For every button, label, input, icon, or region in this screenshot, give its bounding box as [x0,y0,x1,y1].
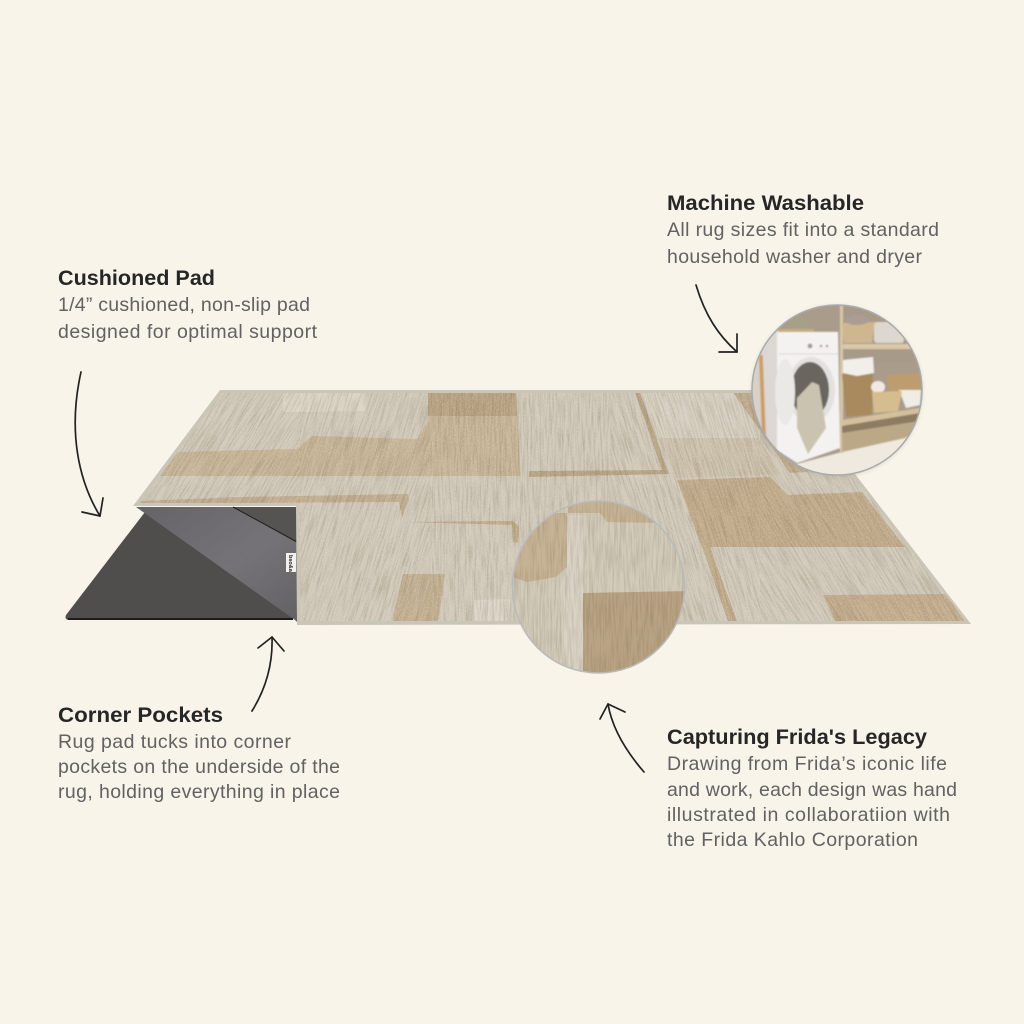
text: Frida legacy: Drawing from Frida’s iconic life [667,753,947,775]
rug: muted tan patch [658,438,782,478]
text: machine washable: household washer and dryer [667,246,922,268]
rug: large tan band [157,392,521,476]
photo: lower cabinet [842,421,920,452]
magnifier: bottom right tan block [583,591,688,677]
photo: glass jars [874,322,904,343]
arrow: Frida legacy [600,704,644,772]
magnifier: vertical weave [510,498,688,676]
rug: L-shaped line [529,392,669,477]
photo: washer body [777,332,840,463]
text: corner pockets [58,704,340,803]
rug [133,390,971,625]
text: Frida legacy: illustrated in collaboratiion with [667,804,950,826]
rug: thin line centre [407,521,519,543]
rug: tan strip behind washer [733,392,808,473]
rug: woven texture slice 5 [760,431,959,621]
text: Frida legacy: the Frida Kahlo Corporation [667,829,918,851]
pad: flat dark corner [66,512,292,620]
rug: tan block bottom right [823,594,965,621]
photo: drum [791,362,829,418]
rug: light lower patch [474,599,510,622]
rug pad [66,507,297,622]
rug: large tan block right [677,477,905,621]
photo: right basket [887,373,921,391]
arrow: machine washable [696,285,737,352]
photo: towels on top basket [845,315,869,325]
photo: top tray [778,329,814,332]
photo: towel [797,382,826,454]
arrow: corner pockets [252,637,284,711]
photo: wood frame [758,354,766,436]
photo: left wall [750,330,780,455]
rug: grain [130,388,975,628]
text: corner pockets: Rug pad tucks into corner [58,731,292,753]
rug: soft top-right patch [640,394,642,396]
text: machine washable [667,192,939,268]
pad: folded underside [136,507,297,622]
magnifier: left tan blob [512,513,567,582]
rug: field [140,393,966,621]
rug: light top patch [283,392,367,412]
magnifier: ring [512,501,684,673]
photo: shelf 2 [842,408,920,426]
photo: shelf 1 [843,344,913,349]
rug: border and base [133,390,971,625]
magnifier: light column [560,515,583,677]
photo: washer side [762,332,778,450]
text: corner pockets: Corner Pockets [58,704,223,727]
photo: white ball [871,381,885,393]
text: corner pockets: pockets on the underside of the [58,756,340,778]
photo: shelf upright [840,303,843,453]
rug: woven texture slice 3 [430,393,610,621]
magnifier: base [514,509,684,666]
magnifier: top tan strip [568,502,654,523]
infographic canvas [58,194,971,850]
washer photo circle [750,303,925,480]
photo: white bowl [899,390,921,408]
photo: back panel light [843,303,923,363]
rug: darker tan top block [428,392,517,416]
photo: vase [788,317,808,335]
rug: thin line left [134,494,409,518]
text: machine washable: Machine Washable [667,192,864,215]
photo: wall [778,306,922,464]
text: cushioned pad [58,267,318,343]
washer photo: ring [752,305,922,475]
pad: white tag: bso&a [287,555,293,573]
pad: bottom edge [68,618,293,620]
pad: fold edge [233,507,297,542]
magnifier circle: rug detail [510,498,688,677]
rug: small tan block [392,574,445,622]
photo: open door [775,359,795,425]
photo: dials [808,344,828,348]
photo: control panel line [779,353,838,355]
rug: woven texture slice 2 [300,393,430,621]
text: Frida legacy: Capturing Frida's Legacy [667,726,927,749]
washer photo: shadow [752,306,922,476]
photo: small basket [872,391,902,413]
pad: inner dark triangle [233,507,297,543]
photo: floor [796,435,908,474]
text: Frida legacy: and work, each design was hand [667,779,957,801]
text: cushioned pad: 1/4” cushioned, non-slip pad [58,294,310,316]
photo: dark under shelf [842,413,920,433]
arrow: cushioned pad [75,372,103,516]
photo: white cloth [843,357,874,376]
rug: woven texture slice 4 [610,393,760,621]
text: corner pockets: rug, holding everything in place [58,781,340,803]
rug: woven texture slice 1 [142,393,300,588]
text: machine washable: All rug sizes fit into a standard [667,219,939,241]
text: cushioned pad: designed for optimal support [58,321,318,343]
photo: top basket [842,322,875,343]
photo: door ring [787,357,835,423]
photo: big woven basket [842,371,873,417]
pad: white tag [286,553,296,573]
text: cushioned pad: Cushioned Pad [58,267,215,290]
text: Frida legacy [667,726,957,851]
